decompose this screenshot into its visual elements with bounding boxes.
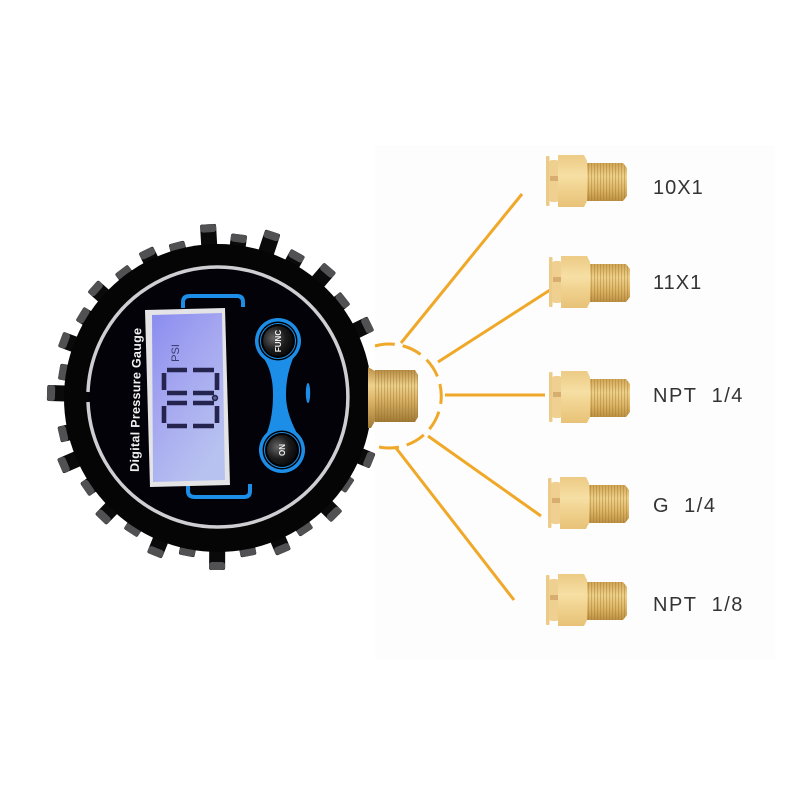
FUNC button: FUNC [274,330,283,352]
LCD reading 00.0 [164,370,217,426]
background panel behind adapters [375,145,775,660]
gauge body [64,244,372,552]
adapter G 1/4 [548,477,716,529]
silver bezel ring [88,267,348,527]
Digital Pressure Gauge label: Digital Pressure Gauge [128,328,144,472]
adapter NPT 1/8: NPT 1/8 [653,594,744,616]
adapter 11X1 [549,256,702,308]
ON button: ON [278,444,287,456]
adapter NPT 1/4: NPT 1/4 [653,385,744,407]
gauge rubber teeth [47,224,376,570]
pressure gauge [47,224,376,570]
LCD frame [145,308,230,487]
blue bracket bottom [188,484,250,497]
PSI unit label: PSI [170,344,182,362]
adapter NPT 1/4 [549,371,744,423]
adapter G 1/4: G 1/4 [653,495,716,517]
orange leader lines [396,194,550,600]
FUNC button [255,318,301,364]
adapter NPT 1/8 [546,574,744,626]
LCD screen [152,313,225,482]
blue dumbbell panel [262,356,298,435]
adapter 11X1: 11X1 [653,272,702,294]
gauge brass connector [368,367,418,428]
ON button [259,427,305,473]
adapter 10X1 [546,155,704,207]
blue lens mark [306,383,310,403]
blue bracket top [183,296,243,308]
dashed connection arc [375,344,441,448]
adapter 10X1: 10X1 [653,177,704,199]
